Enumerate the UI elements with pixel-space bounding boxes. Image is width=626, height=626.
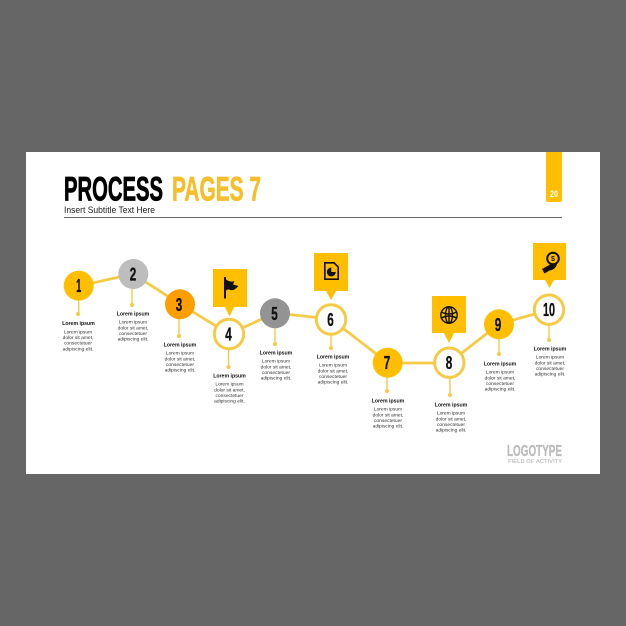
step 3: 3 bbox=[176, 295, 182, 315]
step 4 bbox=[213, 269, 247, 405]
step 1: adipiscing elit. bbox=[63, 346, 93, 352]
step 5 bbox=[260, 298, 293, 382]
step 10: consectetuer bbox=[536, 366, 564, 372]
step 9: consectetuer bbox=[486, 381, 514, 387]
step 5: Lorem ipsum bbox=[260, 350, 293, 356]
step 8: Lorem ipsum bbox=[435, 402, 468, 408]
step 2: Lorem ipsum bbox=[117, 312, 150, 318]
logotype bbox=[507, 443, 562, 465]
callout: globe bbox=[432, 296, 466, 343]
step 4: dolor sit amet, bbox=[214, 387, 245, 393]
step 1: Lorem ipsum bbox=[64, 329, 92, 335]
step 6: dolor sit amet, bbox=[318, 368, 348, 374]
page number tab bbox=[546, 152, 562, 202]
step 10: adipiscing elit. bbox=[535, 372, 565, 378]
logotype: FIELD OF ACTIVITY bbox=[508, 459, 562, 465]
step 9: adipiscing elit. bbox=[485, 387, 515, 393]
step 7: adipiscing elit. bbox=[373, 424, 403, 430]
step 4: consectetuer bbox=[215, 393, 244, 399]
step 1: Lorem ipsum bbox=[62, 321, 95, 327]
step 3 bbox=[164, 289, 197, 374]
step 6 bbox=[314, 253, 350, 386]
step 2 bbox=[117, 259, 150, 343]
step 5: Lorem ipsum bbox=[262, 359, 290, 365]
step 2: consectetuer bbox=[119, 331, 147, 337]
step 10: Lorem ipsum bbox=[536, 355, 564, 361]
step 4: Lorem ipsum bbox=[215, 382, 244, 388]
step 2: adipiscing elit. bbox=[118, 337, 148, 343]
step 8 bbox=[432, 296, 468, 434]
step 4: 4 bbox=[225, 324, 232, 344]
step 8: consectetuer bbox=[437, 422, 465, 428]
step 7: Lorem ipsum bbox=[372, 398, 405, 404]
step 7: consectetuer bbox=[374, 418, 402, 424]
step 5: 5 bbox=[271, 304, 278, 324]
step 10: Lorem ipsum bbox=[534, 346, 567, 352]
step 3: adipiscing elit. bbox=[165, 368, 195, 374]
step 9: Lorem ipsum bbox=[484, 362, 517, 368]
step 9: 9 bbox=[495, 315, 501, 335]
step 6: adipiscing elit. bbox=[318, 380, 348, 386]
step 10: dolor sit amet, bbox=[535, 360, 565, 366]
step 6: Lorem ipsum bbox=[319, 363, 347, 369]
subtitle: Insert Subtitle Text Here bbox=[64, 205, 155, 215]
step 8: Lorem ipsum bbox=[437, 411, 465, 417]
step 1: consectetuer bbox=[64, 341, 92, 347]
step 3: consectetuer bbox=[166, 362, 194, 368]
step 5: adipiscing elit. bbox=[261, 376, 291, 382]
step 1: dolor sit amet, bbox=[63, 335, 93, 341]
step 7: dolor sit amet, bbox=[373, 412, 403, 418]
step 7: Lorem ipsum bbox=[374, 407, 402, 413]
step 10: 10 bbox=[543, 300, 555, 320]
step 4: adipiscing elit. bbox=[214, 399, 245, 405]
logotype: LOGOTYPE bbox=[507, 443, 562, 460]
title: PAGES 7 bbox=[172, 170, 261, 208]
callout: flag bbox=[213, 269, 247, 316]
step 6: 6 bbox=[327, 310, 334, 330]
step 3: Lorem ipsum bbox=[164, 342, 197, 348]
step 3: dolor sit amet, bbox=[165, 356, 195, 362]
step 1 bbox=[62, 271, 95, 352]
step 9 bbox=[484, 309, 517, 393]
step 8: dolor sit amet, bbox=[436, 416, 466, 422]
step 9: dolor sit amet, bbox=[485, 375, 515, 381]
step 4: Lorem ipsum bbox=[213, 374, 246, 380]
title: PROCESS bbox=[64, 170, 163, 208]
step 5: dolor sit amet, bbox=[261, 364, 291, 370]
panel: slide bbox=[26, 152, 600, 474]
step 6: Lorem ipsum bbox=[317, 354, 350, 360]
step 7 bbox=[372, 348, 405, 430]
step 10 bbox=[533, 243, 567, 378]
step 7: 7 bbox=[384, 353, 390, 373]
page number tab: 20 bbox=[550, 189, 558, 199]
step 2: 2 bbox=[130, 264, 136, 284]
step 6: consectetuer bbox=[319, 374, 347, 380]
step 2: Lorem ipsum bbox=[119, 320, 147, 326]
step 5: consectetuer bbox=[262, 370, 290, 376]
step 8: adipiscing elit. bbox=[436, 428, 466, 434]
step 2: dolor sit amet, bbox=[118, 325, 148, 331]
connecting timeline bbox=[79, 274, 549, 363]
step 3: Lorem ipsum bbox=[166, 351, 194, 357]
step 1: 1 bbox=[76, 276, 81, 296]
callout: document chart bbox=[314, 253, 348, 300]
step 9: Lorem ipsum bbox=[486, 370, 514, 376]
step 8: 8 bbox=[446, 353, 452, 373]
callout: hand with coin: $ bbox=[551, 256, 555, 263]
